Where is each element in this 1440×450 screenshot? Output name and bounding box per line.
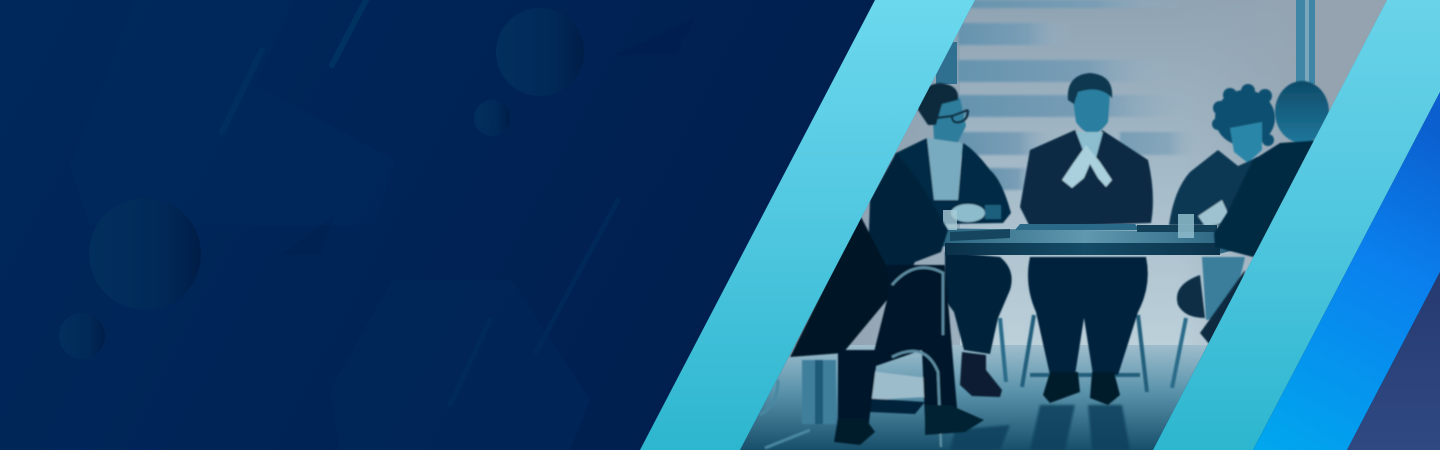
clasped hands (1062, 145, 1112, 188)
woman's crossed legs highlight (863, 370, 927, 400)
meeting photo (740, 0, 1400, 450)
face (932, 98, 966, 148)
jacket back (868, 153, 948, 300)
chair arc highlight (892, 268, 943, 447)
jacket (1020, 130, 1153, 227)
seated woman leg (838, 350, 878, 430)
right wall shade (1219, 0, 1387, 274)
floor reflections (950, 405, 1130, 450)
face (1072, 86, 1110, 134)
trousers (945, 252, 1012, 354)
shirt (927, 138, 962, 200)
trousers (1028, 257, 1148, 375)
man's trousers and chair mass (870, 265, 957, 420)
foreground person at right (1200, 81, 1340, 345)
black shoe (862, 398, 925, 414)
window blinds (958, 0, 1200, 190)
back and jacket (1214, 140, 1340, 257)
seated woman at right (1169, 84, 1275, 388)
chair and legs (1177, 275, 1205, 318)
left wall shade (795, 34, 960, 345)
seated man with glasses (885, 83, 1012, 397)
head and hair (1275, 81, 1329, 143)
bright blue diagonal band (1253, 92, 1440, 450)
hair (918, 83, 958, 125)
notebook on table (950, 229, 1010, 241)
water glass (1178, 214, 1194, 238)
face (1230, 122, 1262, 163)
shirt collar (1076, 132, 1103, 158)
curly hair (1212, 84, 1275, 146)
glasses (936, 110, 968, 122)
decorative faint background shapes (59, 0, 695, 450)
central man (1020, 73, 1153, 405)
hair (1068, 73, 1112, 104)
foreground man at left (760, 153, 984, 448)
window frames (936, 0, 1315, 84)
dress torso (1169, 150, 1262, 225)
conference table (942, 210, 1262, 255)
right light blue diagonal band (1153, 0, 1440, 450)
shoes (1043, 372, 1080, 403)
chair frame (1022, 315, 1147, 392)
jacket (885, 138, 1011, 225)
documents on table (1015, 224, 1140, 230)
floor (740, 345, 1208, 450)
dark indigo corner (1347, 272, 1440, 450)
cuff (985, 205, 1001, 219)
chair base tubes (760, 380, 810, 448)
chair leg (1000, 318, 1006, 382)
left light blue diagonal band (640, 0, 975, 450)
hands (951, 204, 985, 222)
leg (1200, 270, 1245, 345)
shoe and sock (960, 352, 1002, 397)
shoes (834, 418, 875, 445)
seated back body (790, 215, 887, 357)
photo background wall and window (795, 0, 1387, 345)
chair pedestal (802, 360, 836, 424)
papers (1198, 200, 1232, 226)
